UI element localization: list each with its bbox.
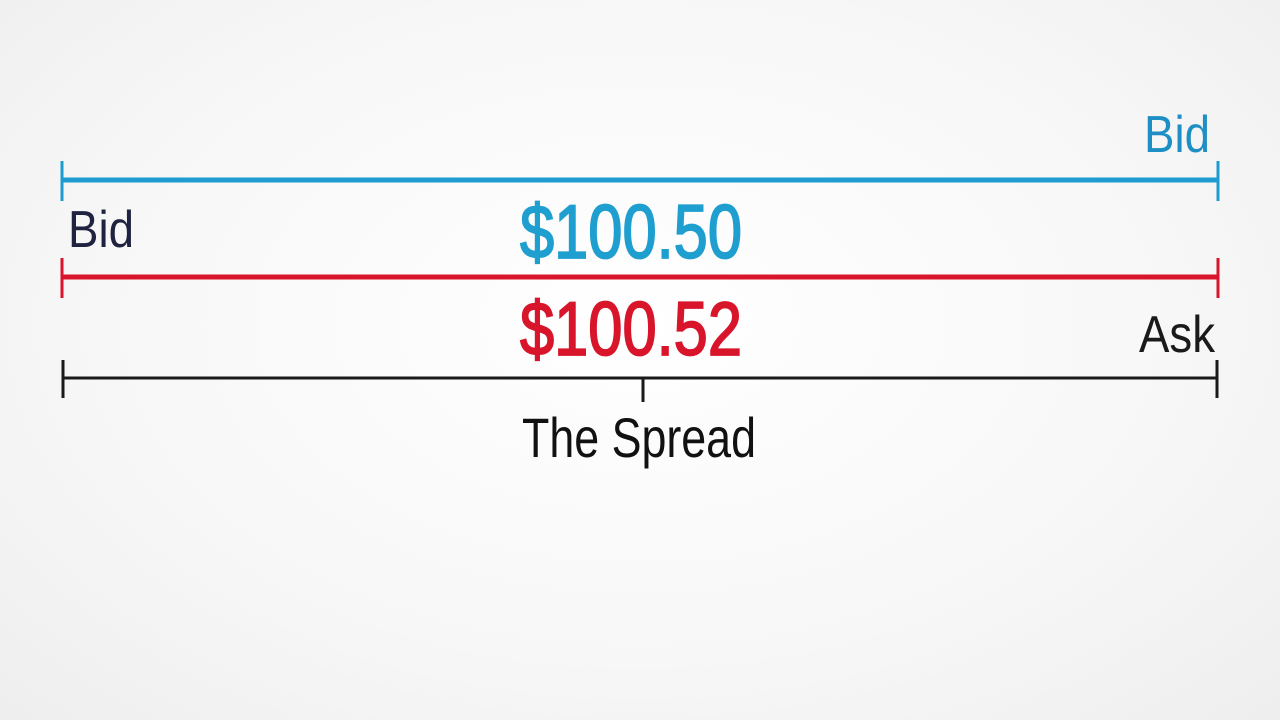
label: The Spread: The Spread xyxy=(522,406,756,469)
blue bid line xyxy=(62,161,1218,201)
label: Ask: Ask xyxy=(1139,306,1216,364)
black spread line xyxy=(62,360,1218,402)
label: Bid top right: Bid xyxy=(1144,106,1210,164)
ask price: $100.52 xyxy=(520,287,742,372)
label: Bid left: Bid xyxy=(68,201,134,259)
bid price: $100.50 xyxy=(520,190,742,275)
red ask line xyxy=(62,258,1218,298)
